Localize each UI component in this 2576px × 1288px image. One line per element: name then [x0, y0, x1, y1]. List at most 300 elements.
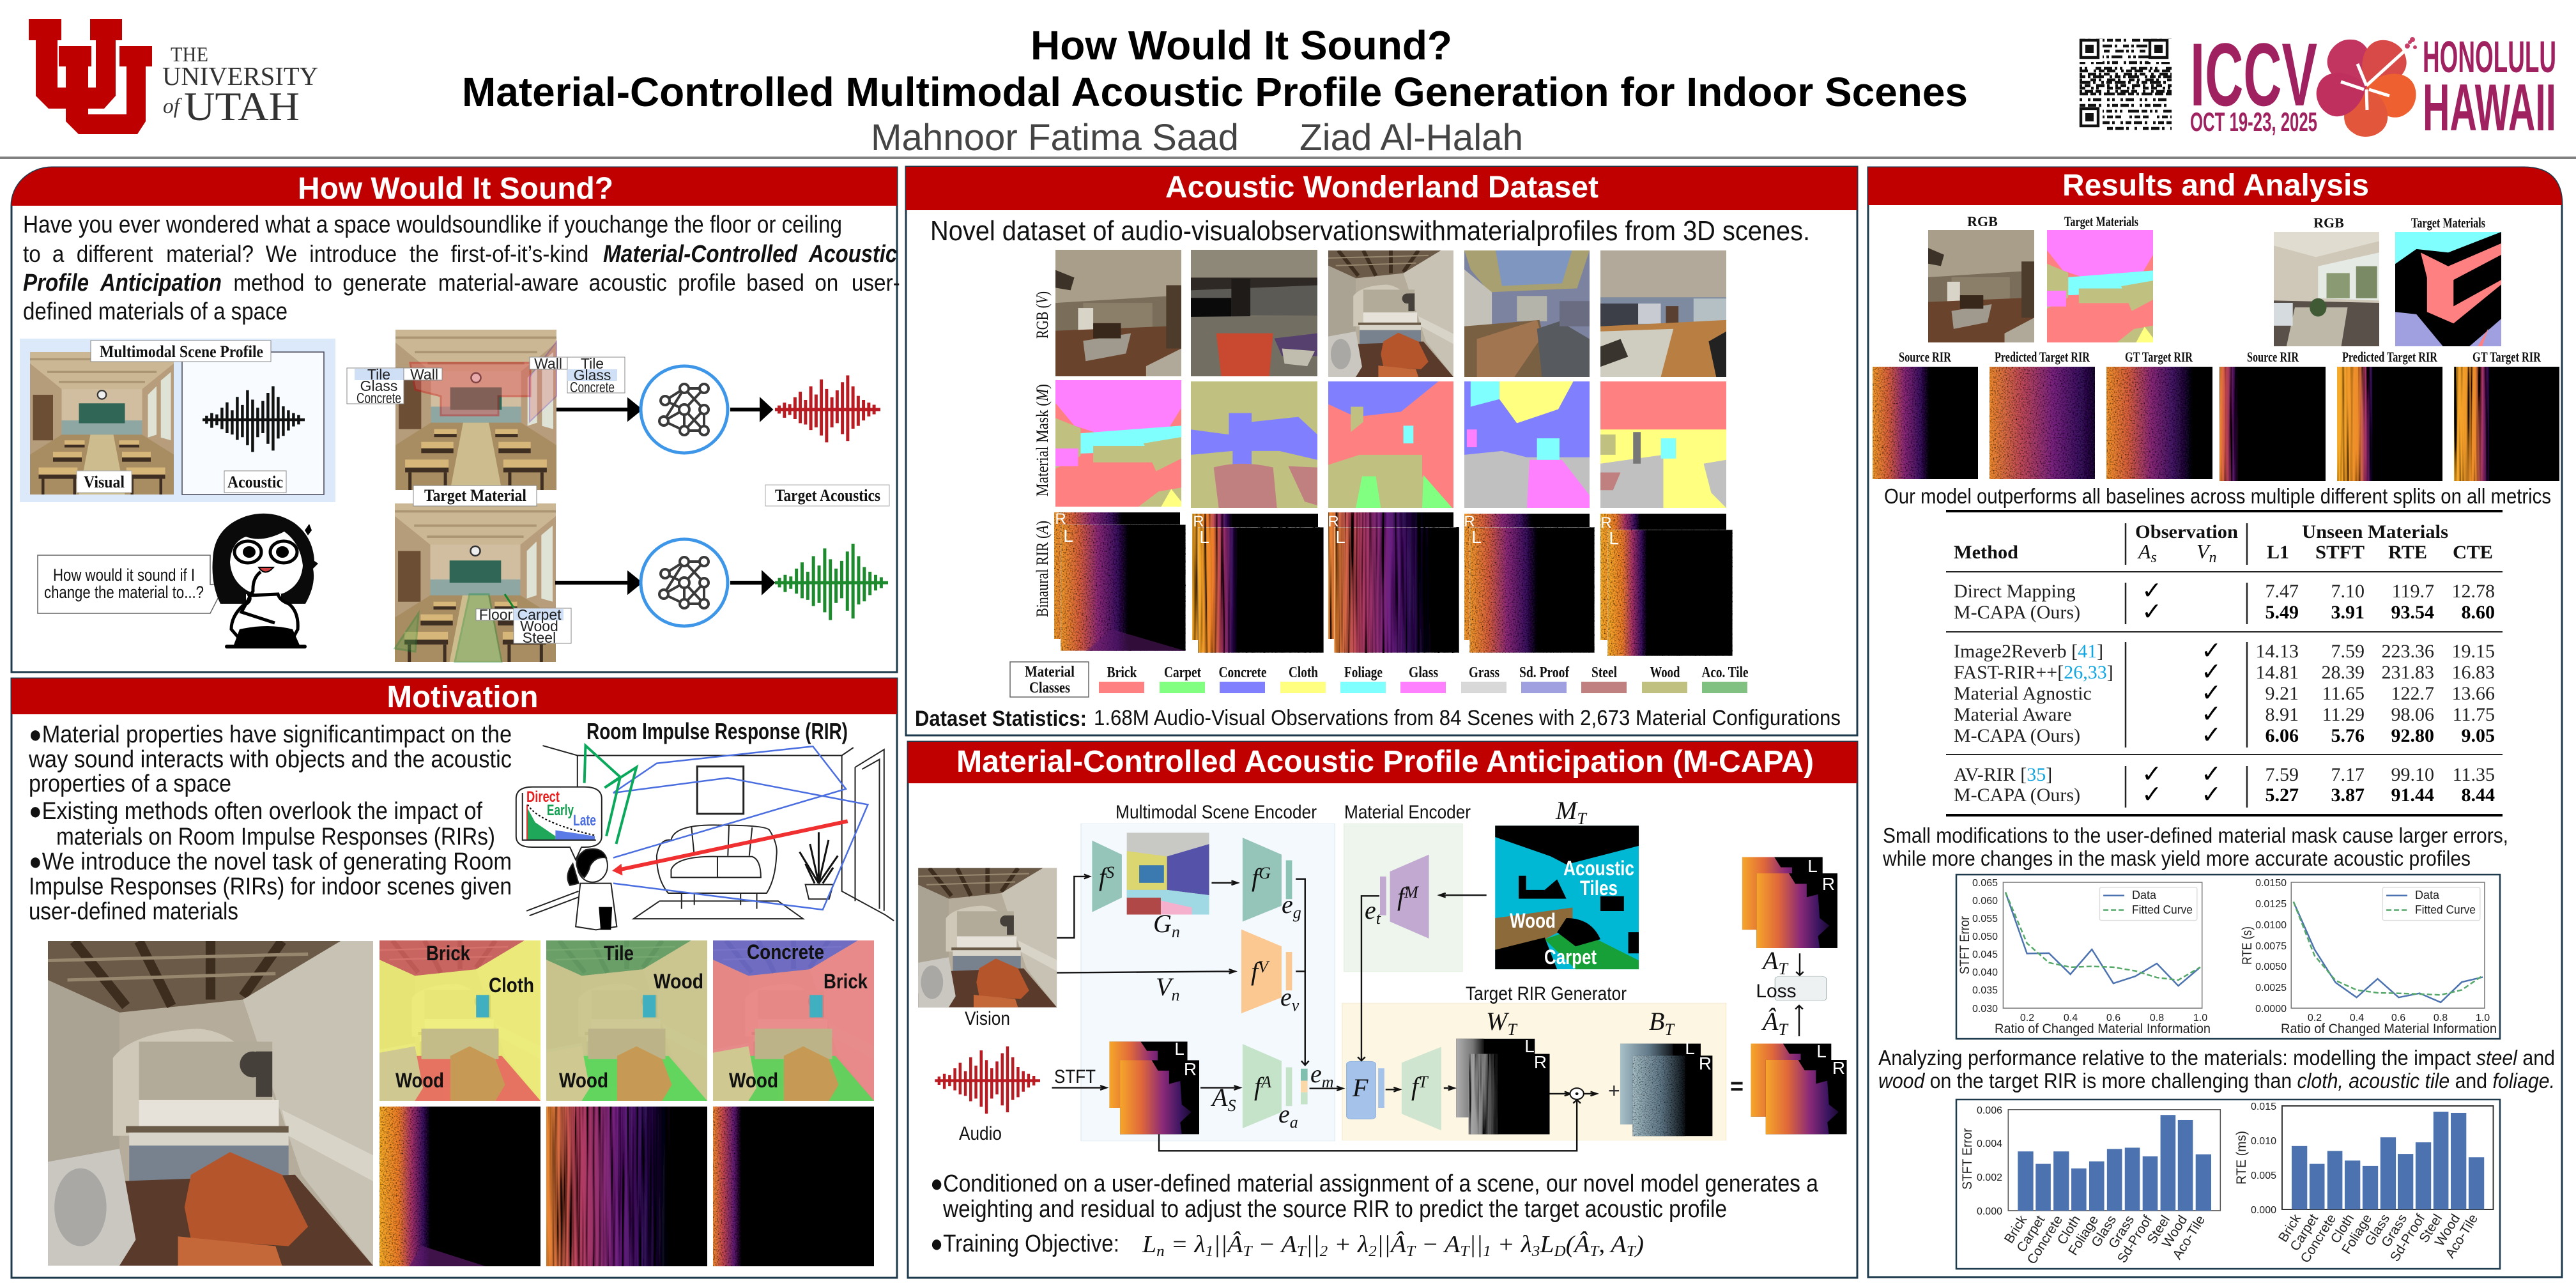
intro text: generate	[342, 270, 427, 296]
line chart: RTE: 0.0125	[2255, 899, 2287, 910]
logo wordmark	[162, 43, 318, 129]
table group: vision only: Material Agnostic	[1954, 683, 2092, 704]
panel heading	[12, 167, 897, 206]
ICCV logo	[2190, 24, 2556, 145]
diagram labels: R	[1822, 874, 1835, 894]
training objective formula: 1	[1483, 1243, 1491, 1260]
training objective formula: , A	[1598, 1231, 1627, 1258]
diagram math symbols: e	[1280, 983, 1292, 1011]
source RIR stack	[1110, 1041, 1199, 1134]
title: How Would It Sound?	[1031, 22, 1452, 68]
table group: source only: 8.60	[2461, 602, 2495, 623]
diagram math symbols: f	[1254, 1072, 1261, 1101]
table group: source only: ✓	[2142, 576, 2162, 604]
label: Visual: Visual	[84, 473, 125, 491]
diagram labels: Multimodal Scene Encoder	[1116, 802, 1317, 823]
table group: vision only: 11.65	[2322, 683, 2365, 704]
intro text: based	[746, 270, 804, 296]
intro text: user-	[852, 270, 900, 296]
table group: vision only: 98.06	[2391, 704, 2434, 725]
materials statement: wood on the target RIR is more challenging than cloth, acoustic tile and foliage.	[1878, 1069, 2555, 1092]
line chart: STFT error: 0.060	[1972, 896, 1998, 907]
armchair	[657, 825, 777, 893]
bar chart: STFT error: STFT Error	[1960, 1128, 1975, 1190]
intro text: a	[52, 241, 65, 267]
spectrogram 3	[713, 1107, 874, 1266]
diagram math symbols: T	[1577, 809, 1587, 828]
line chart: STFT error	[1958, 878, 2211, 1036]
large scene photo	[48, 941, 373, 1266]
legend labels: Cloth	[1289, 664, 1318, 681]
visual photo	[30, 352, 174, 494]
line chart: STFT error: 0.055	[1972, 914, 1998, 924]
legend swatches	[1099, 682, 1747, 693]
pipeline top	[556, 366, 880, 453]
material classes legend	[1010, 662, 1749, 697]
table group: vision only: Material Aware	[1954, 704, 2072, 725]
dropdown bottom: floor: Floor	[479, 606, 513, 623]
material variant 2: Wood	[654, 970, 703, 993]
panel heading	[1868, 167, 2562, 205]
motivation bullets	[28, 721, 512, 925]
dropdown left: wall	[347, 366, 442, 406]
material variant 2	[546, 940, 707, 1101]
line chart: RTE: 0.6	[2391, 1013, 2405, 1023]
line chart: STFT error: 0.8	[2150, 1013, 2164, 1023]
training objective formula: ||	[1469, 1231, 1483, 1258]
row label RGB: RGB (V)	[1033, 291, 1052, 339]
icon: neural network	[641, 366, 728, 453]
table group: vision only: 92.80	[2391, 725, 2434, 746]
table group: source only	[1954, 576, 2495, 625]
line chart: STFT error: 0.050	[1972, 931, 1998, 942]
line chart: STFT error: Data	[2132, 889, 2157, 901]
bar chart: STFT error: Carpet	[2014, 1213, 2048, 1255]
red direct path	[620, 821, 848, 870]
diagram math symbols: Â	[1763, 1007, 1778, 1036]
table group: source only: 12.78	[2452, 581, 2495, 602]
table header: Unseen Materials	[2302, 521, 2448, 542]
diagram math symbols: e	[1310, 1059, 1322, 1088]
diagram math symbols: T	[1778, 1020, 1788, 1039]
legend labels: Brick	[1107, 664, 1137, 681]
training objective formula: − A	[1252, 1231, 1298, 1258]
logo wordmark: UNIVERSITY	[162, 61, 318, 91]
table group: vision only: M-CAPA (Ours)	[1954, 725, 2080, 746]
dataset statistics: Dataset Statistics:	[915, 707, 1087, 731]
logo mark: interlocking U	[29, 19, 152, 134]
chart bubble	[516, 787, 602, 860]
diagram math symbols	[1099, 796, 1788, 1131]
panel heading: How Would It Sound?	[298, 172, 613, 206]
legend labels: Steel	[1591, 664, 1617, 681]
ICCV wordmark: ICCV	[2190, 24, 2317, 125]
diagram labels	[959, 802, 1845, 1144]
encoder f^M	[1390, 855, 1429, 939]
intro text: method	[233, 270, 304, 296]
vision photo	[918, 868, 1057, 1008]
intro text: introduce	[309, 241, 397, 267]
diagram labels: STFT	[1054, 1066, 1096, 1087]
table group: vision only: 16.83	[2452, 662, 2495, 683]
predicted target stack	[1751, 1044, 1847, 1134]
diagram labels: L	[1524, 1036, 1535, 1056]
embedding et	[1380, 877, 1386, 916]
bar chart: STFT error: Foliage	[2066, 1213, 2101, 1258]
bar chart: RTE: RTE (ms)	[2234, 1131, 2249, 1184]
diagram labels: R	[1534, 1052, 1547, 1072]
line chart: STFT error: 0.065	[1972, 878, 1998, 889]
table group: audio-visual	[1954, 760, 2495, 808]
diagram math symbols: A	[1763, 946, 1778, 975]
intro text: first-of-it’s-kind	[451, 241, 588, 267]
residual BT stack	[1620, 1044, 1712, 1136]
material variant 3	[713, 940, 874, 1101]
training objective formula: T	[1406, 1243, 1416, 1260]
bar chart: STFT error: Concrete	[2025, 1213, 2066, 1267]
green waveform	[775, 544, 888, 620]
table group: audio-visual: 8.44	[2461, 785, 2495, 806]
result spectrograms: Predicted Target RIR	[2342, 349, 2438, 365]
diagram math symbols: g	[1293, 903, 1301, 922]
table group: vision only: 7.59	[2331, 641, 2365, 662]
table header: RTE	[2388, 542, 2427, 563]
line chart: STFT error: 1.0	[2193, 1013, 2207, 1023]
encoder f^S	[1092, 841, 1122, 912]
encoder background: multimodal scene	[1081, 824, 1335, 1141]
result spectrograms: Source RIR	[1899, 349, 1952, 365]
training objective formula: 3	[1531, 1243, 1540, 1260]
authors	[871, 117, 1523, 158]
table group: audio-visual: 11.35	[2453, 764, 2495, 785]
table group: vision only: 9.05	[2461, 725, 2495, 746]
diagram labels: L	[1174, 1039, 1184, 1059]
row label binaural RIR: Binaural RIR (A)	[1033, 521, 1052, 617]
line chart: RTE: 0.0050	[2255, 962, 2287, 972]
training objective formula: ||	[1306, 1231, 1320, 1258]
training objective formula: 2	[1320, 1243, 1328, 1260]
RIR scene 2: R	[1193, 513, 1204, 530]
table group: source only: 119.7	[2392, 581, 2434, 602]
legend labels: Wood	[1650, 664, 1680, 681]
diagram math symbols: f	[1397, 882, 1404, 911]
table header: Observation	[2135, 521, 2238, 542]
table header: s	[2151, 549, 2157, 566]
RIR scene 5	[1600, 514, 1733, 656]
panel heading: Material-Controlled Acoustic Profile Anticipation (M-CAPA)	[956, 745, 1814, 779]
diagram math symbols: B	[1649, 1007, 1664, 1036]
diagram math symbols: f	[1251, 957, 1258, 986]
bar chart: RTE: 0.000	[2251, 1205, 2276, 1216]
table group: vision only: 5.76	[2331, 725, 2365, 746]
table header	[1954, 521, 2493, 566]
dropdown right: wall	[530, 355, 625, 395]
intro text: to	[23, 241, 41, 267]
logo: University of Utah	[29, 19, 318, 134]
diagram math symbols: S	[1227, 1096, 1236, 1115]
bar chart: STFT error: Sd-Proof	[2115, 1213, 2155, 1266]
diagram math symbols: t	[1376, 909, 1381, 928]
panel: Motivation	[12, 678, 897, 1278]
room diagram	[516, 746, 894, 930]
diagram math symbols: F	[1352, 1073, 1368, 1102]
material variant 1	[379, 940, 540, 1101]
speech bubble: change the material to...?	[44, 583, 204, 602]
blue reflections	[613, 746, 868, 910]
weight WT stack	[1456, 1039, 1550, 1134]
label: Visual	[77, 471, 132, 493]
bar chart: STFT error: 0.006	[1977, 1105, 2002, 1116]
diagram math symbols: f	[1099, 862, 1106, 891]
bar chart: STFT error: Wood	[2159, 1213, 2190, 1250]
dropdown left: wall: Concrete	[356, 390, 401, 406]
table group: audio-visual: AV-RIR [35]	[1954, 764, 2052, 785]
diagram math symbols: a	[1290, 1113, 1298, 1131]
binaural RIR row	[1054, 510, 1733, 656]
line chart: STFT error: 0.2	[2020, 1013, 2034, 1023]
training objective formula: + λ	[1491, 1231, 1532, 1258]
diagram math symbols: f	[1252, 863, 1259, 892]
table group: vision only: 223.36	[2382, 641, 2434, 662]
diagram math symbols: n	[1171, 986, 1179, 1004]
dataset statistics: 1.68M Audio-Visual Observations from 84 Scenes with 2,673 Material Configurations	[1094, 706, 1841, 730]
table header: STFT	[2315, 542, 2365, 563]
dropdown right: wall: Tile	[581, 355, 604, 372]
bar chart: RTE	[2234, 1101, 2494, 1266]
line chart: RTE: RTE (s)	[2240, 926, 2255, 965]
title: Material-Controlled Multimodal Acoustic Profile Generation for Indoor Scenes	[462, 69, 1968, 115]
table group: vision only: 6.06	[2266, 725, 2299, 746]
green reflections	[585, 746, 636, 844]
intro text	[23, 211, 900, 325]
line chart: STFT error: 0.040	[1972, 967, 1998, 978]
intro text: material?	[166, 241, 254, 267]
bar chart: RTE: Carpet	[2287, 1211, 2321, 1254]
intro text: to	[314, 270, 332, 296]
table group: source only: 3.91	[2331, 602, 2365, 623]
diagram math symbols: V	[1156, 972, 1171, 1001]
bar chart: RTE: 0.010	[2251, 1136, 2276, 1147]
diagram labels: Material Encoder	[1344, 802, 1471, 823]
table group: vision only: ✓	[2201, 700, 2221, 728]
logo wordmark: UTAH	[184, 84, 300, 129]
dropdown left: wall: Wall	[410, 366, 438, 383]
legend labels: Grass	[1469, 664, 1499, 681]
modification statement	[1882, 824, 2508, 870]
table header: n	[2209, 549, 2217, 566]
dropdown right: wall: Wall	[534, 355, 562, 372]
embedding ev	[1286, 952, 1292, 990]
diagram labels: R	[1699, 1054, 1712, 1073]
bar chart: RTE: Brick	[2276, 1211, 2304, 1245]
dropdown left: wall: Glass	[360, 378, 397, 394]
RIR scene 3: R	[1328, 513, 1339, 530]
diagram labels: Carpet	[1544, 946, 1597, 969]
curve labels	[526, 788, 596, 829]
bar chart: RTE: Sd-Proof	[2388, 1211, 2428, 1264]
dropdown right: wall: Concrete	[570, 379, 615, 395]
panel: How Would It Sound?	[12, 167, 900, 672]
line chart: RTE: 0.8	[2434, 1013, 2448, 1023]
intro text: defined materials of a space	[23, 298, 288, 325]
table header: A	[2138, 540, 2151, 563]
label: Multimodal Scene Profile: Multimodal Scene Profile	[100, 342, 263, 361]
intro text: on	[815, 270, 838, 296]
motivation bullets: ●Existing methods often overlook the impact of	[29, 798, 482, 825]
legend title: Material	[1025, 664, 1075, 680]
material variant 2: Tile	[604, 942, 634, 965]
legend labels: Glass	[1409, 664, 1438, 681]
table group: vision only	[1954, 636, 2495, 749]
training objective formula: T	[1460, 1243, 1470, 1260]
example 2 images: RGB	[2313, 215, 2344, 231]
RIR scene 3: L	[1335, 527, 1346, 547]
legend labels: Aco. Tile	[1702, 664, 1749, 681]
bar chart: RTE: Wood	[2432, 1211, 2463, 1249]
arrow	[730, 574, 772, 591]
legend labels: Carpet	[1164, 664, 1201, 681]
intro text: Profile	[23, 270, 89, 296]
flow arrows	[1052, 875, 1804, 1151]
diagram math symbols: A	[1260, 1073, 1271, 1091]
table group: audio-visual: ✓	[2201, 780, 2221, 808]
line chart: STFT error: 0.035	[1972, 985, 1998, 996]
dropdown bottom: floor: Wood	[520, 618, 558, 634]
diagram math symbols: G	[1259, 864, 1271, 882]
speech bubble	[38, 555, 226, 613]
training objective formula: n	[1156, 1243, 1165, 1260]
legend title	[1010, 662, 1089, 697]
line chart: RTE: Ratio of Changed Material Information	[2281, 1022, 2497, 1036]
RIR scene 2: L	[1199, 527, 1209, 547]
diagram math symbols: T	[1418, 1073, 1429, 1091]
diagram math symbols: T	[1778, 960, 1788, 978]
line chart: RTE: Fitted Curve	[2415, 903, 2476, 916]
diagram labels: =	[1730, 1073, 1744, 1099]
table group: vision only: 11.75	[2453, 704, 2495, 725]
table header: CTE	[2453, 542, 2493, 563]
arrow	[730, 401, 770, 418]
line chart: RTE: 0.2	[2308, 1013, 2322, 1023]
pipeline bottom	[555, 539, 888, 626]
RIR scene 4: L	[1471, 527, 1482, 547]
line charts	[1956, 875, 2500, 1039]
table group: source only: ✓	[2142, 597, 2162, 625]
material variant 2: Wood	[559, 1069, 608, 1092]
bar chart: STFT error: Brick	[2002, 1213, 2030, 1246]
motivation bullets: properties of a space	[29, 770, 231, 797]
diagram math symbols: e	[1282, 890, 1293, 919]
bar chart: STFT error: 0.000	[1977, 1206, 2002, 1217]
logo wordmark: of	[163, 95, 182, 118]
bar chart: STFT error	[1960, 1105, 2220, 1267]
line chart: STFT error: 0.4	[2064, 1013, 2078, 1023]
panel: Acoustic Wonderland Dataset	[906, 167, 1857, 735]
encoder f^A	[1243, 1044, 1282, 1128]
bar chart: RTE: Glass	[2362, 1211, 2393, 1248]
table group: vision only: ✓	[2201, 657, 2221, 686]
RIR scene 5: R	[1600, 514, 1612, 532]
diagram labels: L	[1807, 856, 1818, 876]
diagram math symbols: e	[1278, 1100, 1290, 1128]
result spectrograms: GT Target RIR	[2125, 349, 2193, 365]
intro text: material-aware	[438, 270, 579, 296]
diagram labels: Acoustic	[1563, 857, 1634, 880]
intro text: profile	[678, 270, 736, 296]
conference date: OCT 19-23, 2025	[2190, 107, 2317, 137]
modification statement: while more changes in the mask yield more accurate acoustic profiles	[1882, 847, 2471, 870]
example 2 images	[2274, 215, 2501, 346]
material variant 1: Cloth	[489, 974, 534, 997]
table group: vision only: ✓	[2201, 636, 2221, 664]
diagram math symbols: A	[1212, 1083, 1227, 1112]
material mask row	[1055, 380, 1726, 508]
training objective formula: ||Â	[1213, 1231, 1243, 1258]
acoustic box	[182, 352, 324, 494]
dropdown bottom: floor: Carpet	[517, 606, 562, 623]
table group: vision only: 9.21	[2266, 683, 2299, 704]
line chart: RTE	[2240, 878, 2497, 1036]
diagram math symbols: G	[1153, 909, 1172, 938]
generator background	[1342, 1003, 1726, 1140]
training objective formula: T	[1297, 1243, 1307, 1260]
training objective formula: L	[1539, 1231, 1554, 1258]
authors: Ziad Al-Halah	[1300, 117, 1523, 158]
motivation bullets: way sound interacts with objects and the acoustic	[28, 746, 512, 773]
table group: source only: M-CAPA (Ours)	[1954, 602, 2080, 623]
table group: vision only: 14.81	[2255, 662, 2299, 683]
speech bubble: How would it sound if I	[53, 565, 195, 585]
table group: vision only: 11.29	[2322, 704, 2365, 725]
encoder f^G	[1243, 838, 1282, 922]
icon: hibiscus flower	[2312, 31, 2422, 137]
material variant 3: Wood	[729, 1069, 778, 1092]
diagram math symbols: e	[1365, 896, 1376, 924]
diagram math symbols: V	[1258, 958, 1270, 976]
motivation bullets: user-defined materials	[29, 898, 238, 925]
person	[576, 884, 617, 930]
RIR scene 1: L	[1063, 526, 1073, 546]
dropdown bottom: floor	[476, 606, 571, 646]
bar chart: RTE: Foliage	[2339, 1211, 2375, 1257]
intro text: Acoustic	[808, 241, 897, 268]
table group: audio-visual: 7.59	[2266, 764, 2299, 785]
materials statement	[1878, 1046, 2555, 1092]
table group: audio-visual: 5.27	[2266, 785, 2299, 806]
logo wordmark: THE	[171, 43, 208, 66]
training objective formula: T	[1627, 1243, 1636, 1260]
panel heading: Results and Analysis	[2062, 169, 2369, 203]
diagram labels: R	[1832, 1058, 1845, 1078]
example 1 images: RGB	[1967, 213, 1998, 229]
target material classroom top	[395, 330, 556, 490]
training objective formula: L	[1142, 1231, 1156, 1258]
table group: vision only: 19.15	[2452, 641, 2495, 662]
diagram math symbols: T	[1664, 1020, 1675, 1039]
table group: vision only: 8.91	[2266, 704, 2299, 725]
diagram labels: Target RIR Generator	[1466, 983, 1627, 1004]
results table	[1946, 510, 2503, 816]
training objective formula: T	[1590, 1243, 1600, 1260]
diagram math symbols: m	[1322, 1073, 1334, 1091]
result spectrograms	[1873, 349, 2559, 481]
bar chart: STFT error: Glass	[2089, 1213, 2119, 1250]
ground truth target stack	[1742, 857, 1837, 948]
audio waveform	[935, 1046, 1040, 1114]
bar chart: RTE: Cloth	[2328, 1211, 2357, 1246]
RIR scene 2	[1192, 513, 1324, 653]
table group: audio-visual: 3.87	[2331, 785, 2365, 806]
